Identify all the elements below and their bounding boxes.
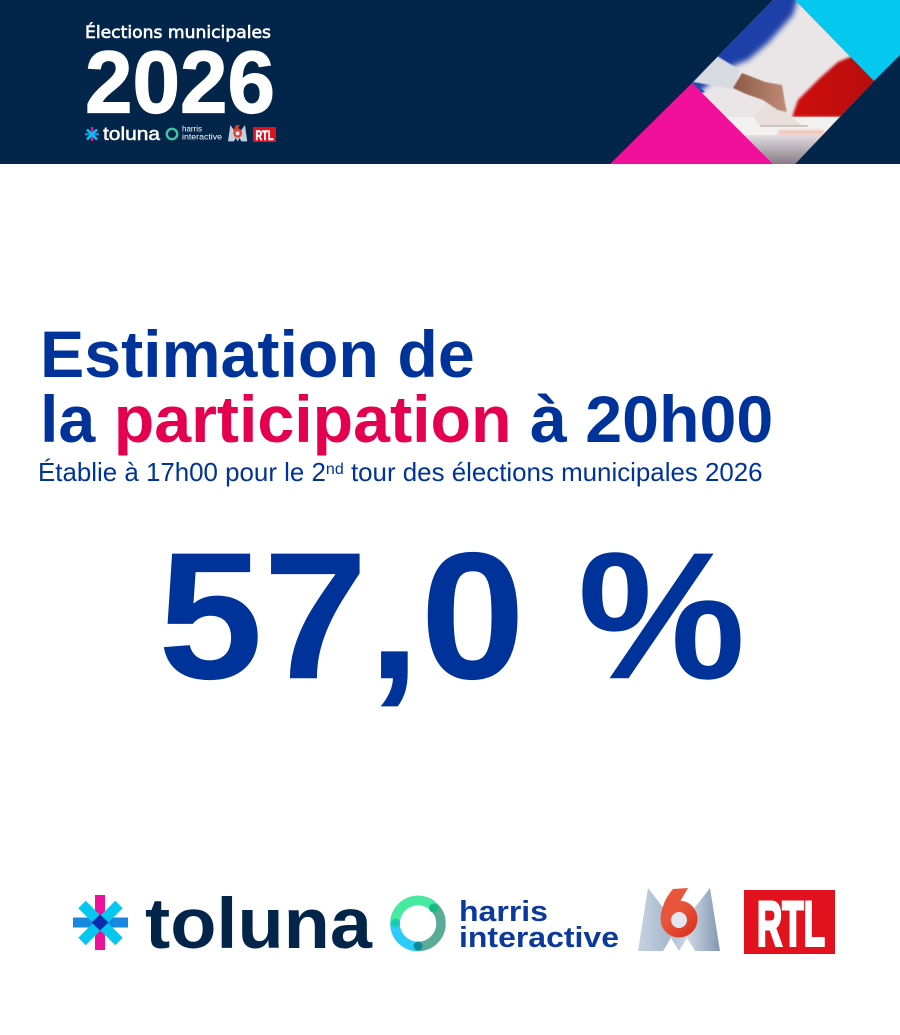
photo: hand voting in front of French flag xyxy=(692,0,874,164)
icon: M6 logo xyxy=(638,888,720,951)
RTL logo: RTL xyxy=(757,890,825,960)
header banner xyxy=(0,0,900,164)
harris wordmark: harris xyxy=(459,896,548,928)
icon: small toluna star xyxy=(85,127,99,141)
cyan triangle xyxy=(795,0,900,81)
icon: small harris ring xyxy=(167,129,177,139)
small RTL logo xyxy=(253,127,276,143)
pink triangle xyxy=(610,83,773,164)
icon: small M6 logo xyxy=(228,125,247,141)
RTL logo xyxy=(744,890,835,960)
small RTL logo: RTL xyxy=(256,127,274,143)
icon: toluna star xyxy=(73,895,128,950)
banner text and small logos xyxy=(85,21,276,144)
small toluna wordmark: toluna xyxy=(103,124,161,144)
heading: la participation à 20h00 xyxy=(40,382,773,456)
banner year: 2026 xyxy=(85,32,275,132)
banner title: Élections municipales xyxy=(85,21,271,43)
small harris wordmark: harris xyxy=(182,124,202,134)
interactive wordmark: interactive xyxy=(459,922,619,954)
subheading: Établie à 17h00 pour le 2nd tour des élections municipales 2026 xyxy=(38,459,763,487)
icon: harris ring xyxy=(391,900,441,950)
small interactive wordmark: interactive xyxy=(182,132,223,142)
main figure: 57,0 % xyxy=(158,516,745,717)
toluna wordmark: toluna xyxy=(145,885,373,964)
heading xyxy=(40,318,773,456)
heading: Estimation de xyxy=(40,318,475,392)
